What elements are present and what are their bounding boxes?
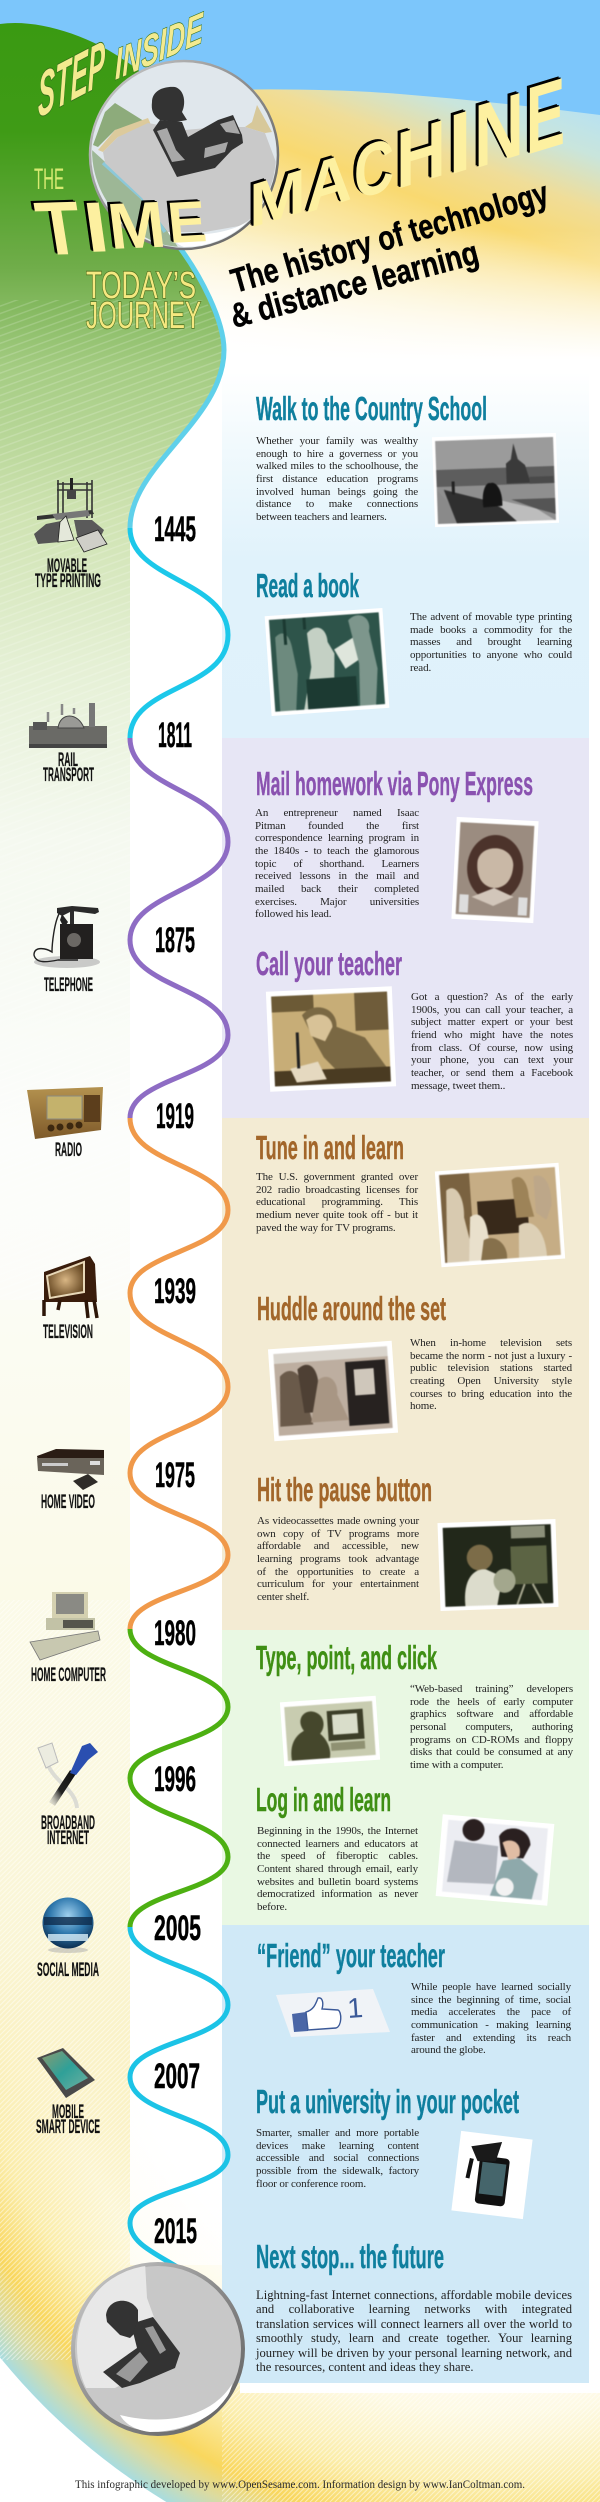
- text: huddle around the set: public television stations started: [410, 1362, 572, 1374]
- text: log in and learn: Content shared through email, early: [257, 1863, 418, 1875]
- text: next stop the future: and collaborative learning networks with integrated: [256, 2302, 572, 2316]
- technology labels: TELEPHONE: [44, 975, 93, 996]
- heading: Call your teacher: Call your teacher: [256, 945, 402, 982]
- heading: Read a book: Read a book: [256, 567, 359, 604]
- icon: television: [44, 1256, 97, 1318]
- text: put a university in your pocket: possible from the sidewalk, factory: [256, 2165, 419, 2177]
- text: hit the pause button: own copy of TV programs more: [257, 1528, 419, 1540]
- text: log in and learn: democratized information as never: [257, 1888, 418, 1900]
- text: read a book: opportunities to anyone who could: [410, 649, 572, 661]
- text: mail homework: Pitman founded the first: [255, 820, 419, 832]
- icon: broadband cables: [38, 1743, 98, 1808]
- timeline years: 1445: [154, 510, 196, 549]
- text: log in and learn: websites and bulletin board systems: [257, 1876, 418, 1888]
- text: tune in and learn: [256, 1171, 418, 1234]
- text: tune in and learn: The U.S. government granted over: [256, 1171, 418, 1183]
- technology labels: BROADBAND: [41, 1813, 95, 1834]
- text: walk to school: involved human beings going the: [256, 486, 418, 498]
- text: type, point, and click: “Web-based training” developers: [410, 1683, 573, 1695]
- technology labels: MOBILE: [52, 2102, 84, 2123]
- text: hit the pause button: As videocassettes made owning your: [257, 1515, 419, 1527]
- text: mail homework: the 1840s - to teach the glamorous: [255, 845, 419, 857]
- text: put a university in your pocket: [256, 2127, 420, 2190]
- text: tune in and learn: 202 radio broadcasting licenses for: [256, 1184, 418, 1196]
- timeline years: 2005: [154, 1909, 201, 1948]
- panel: mail and call (purple): [222, 738, 589, 1118]
- text: next stop the future: smoothly study, learn and create together. Your learning: [256, 2331, 572, 2345]
- text: call your teacher: from class. Of course, now using: [411, 1042, 573, 1054]
- text: type, point, and click: [410, 1683, 574, 1771]
- text: put a university in your pocket: devices make learning content: [256, 2140, 419, 2152]
- timeline years: 2015: [154, 2212, 197, 2251]
- text: log in and learn: the speed of fiberoptic cables.: [257, 1850, 418, 1862]
- timeline years: 1875: [155, 921, 195, 960]
- text: friend your teacher: communication - making learning: [411, 2019, 571, 2031]
- text: huddle around the set: courses to bring education into the: [410, 1388, 572, 1400]
- icon: video recorder: [37, 1449, 104, 1490]
- text: call your teacher: 1900s, you can call your teacher, a: [411, 1004, 573, 1016]
- text: type, point, and click: disks that could be consumed at any: [410, 1746, 573, 1758]
- title: Machine: H: [396, 103, 446, 207]
- text: friend your teacher: media accelerates the pace of: [411, 2006, 571, 2018]
- title: Time: E: [165, 190, 209, 256]
- photo: boy at computer: [280, 1696, 380, 1766]
- text: walk to school: walked miles to the schoolhouse, the: [256, 460, 418, 472]
- title: Machine: C: [354, 122, 394, 217]
- heading: Tune in and learn: Tune in and learn: [256, 1129, 404, 1166]
- title: Today's Journey: [86, 265, 201, 337]
- text: call your teacher: message, tweet them..: [411, 1080, 505, 1092]
- title: Time: T: [30, 186, 88, 271]
- photo: painter on television: [438, 1519, 558, 1611]
- credit line: This infographic developed by www.OpenSesame.com. Information design by www.IanColtman.com.: [75, 2478, 525, 2491]
- icon: home computer: [30, 1592, 100, 1660]
- text: walk to school: [256, 435, 418, 523]
- text: type, point, and click: time with a computer.: [410, 1759, 503, 1771]
- title: Machine: [249, 57, 565, 242]
- text: log in and learn: connected learners and educators at: [257, 1838, 418, 1850]
- text: type, point, and click: rode the heels of early computer: [410, 1696, 573, 1708]
- text: huddle around the set: creating Open University style: [410, 1375, 572, 1387]
- text: mail homework: exercises. Major universities: [255, 896, 419, 908]
- text: type, point, and click: programs on CD-ROMs and floppy: [410, 1734, 573, 1746]
- photo: man on telephone: [266, 986, 396, 1092]
- heading: Next stop... the future: Next stop... the future: [256, 2238, 444, 2275]
- text: log in and learn: before.: [257, 1901, 287, 1913]
- text: call your teacher: your phone, you can text your: [411, 1054, 573, 1066]
- photo: children around radio: [435, 1163, 565, 1267]
- text: mail homework: received lessons in the mail and: [255, 870, 419, 882]
- top time machine porthole: [90, 61, 278, 250]
- text: friend your teacher: around the globe.: [411, 2044, 486, 2056]
- text: call your teacher: subject matter expert or your best: [411, 1016, 573, 1028]
- timeline, years, icons and header artwork: SMART DEVICE: [36, 2117, 100, 2138]
- title: Machine: N: [474, 73, 524, 189]
- photo: country church: [432, 433, 559, 527]
- technology labels: MOVABLE: [47, 556, 87, 577]
- text: huddle around the set: home.: [410, 1400, 437, 1412]
- timeline years: 1975: [155, 1456, 195, 1495]
- text: mail homework: followed his lead.: [255, 908, 331, 920]
- text: hit the pause button: center shelf.: [257, 1591, 309, 1603]
- text: next stop the future: Lightning-fast Internet connections, affordable mobile devices: [256, 2288, 572, 2302]
- text: hit the pause button: [257, 1515, 420, 1603]
- timeline, years, icons and header artwork: HOME COMPUTER: [31, 1665, 106, 1686]
- timeline years: 1919: [156, 1097, 194, 1136]
- photo: Franklin stamp: [451, 817, 539, 923]
- panel: walk and read (blue): [222, 350, 589, 738]
- heading: Huddle around the set: Huddle around the set: [257, 1290, 446, 1327]
- text: call your teacher: Got a question? As of the early: [411, 991, 573, 1003]
- technology labels: RAIL: [58, 750, 78, 771]
- text: friend your teacher: since the beginning of time, social: [411, 1994, 571, 2006]
- text: next stop the future: journey will be driven by your personal learning network, and: [256, 2346, 572, 2360]
- text: log in and learn: Beginning in the 1990s, the Internet: [257, 1825, 418, 1837]
- title: Step Inside: [38, 3, 204, 132]
- text: walk to school: distance to make connections: [256, 498, 418, 510]
- text: put a university in your pocket: floor or conference room.: [256, 2178, 366, 2190]
- text: huddle around the set: became the norm - not just a luxury -: [410, 1350, 572, 1362]
- title: The: THE: [34, 163, 64, 196]
- text: type, point, and click: graphics software and affordable: [410, 1708, 573, 1720]
- text: next stop the future: the resources, content and ideas they share.: [256, 2360, 474, 2374]
- timeline years: 2007: [154, 2057, 200, 2096]
- subtitle: history of technology and distance learning: [226, 174, 553, 336]
- text: tune in and learn: medium never quite took off - but it: [256, 1209, 418, 1221]
- text: put a university in your pocket: Smarter, smaller and more portable: [256, 2127, 419, 2139]
- text: walk to school: first distance education programs: [256, 473, 418, 485]
- text: mail homework: [255, 807, 419, 920]
- text: huddle around the set: When in-home television sets: [410, 1337, 572, 1349]
- title: Time: [30, 186, 209, 271]
- text: hit the pause button: learning programs took advantage: [257, 1553, 419, 1565]
- text: read a book: [410, 611, 572, 674]
- text: hit the pause button: of the opportunities to create a: [257, 1566, 419, 1578]
- text: hit the pause button: affordable and accessible, new: [257, 1540, 419, 1552]
- icon: printing press: [34, 478, 107, 552]
- technology labels: TELEVISION: [43, 1322, 93, 1343]
- icon: radio: [27, 1087, 103, 1139]
- text: walk to school: between teachers and learners.: [256, 511, 387, 523]
- text: call your teacher: [411, 991, 574, 1092]
- text: type, point, and click: personal computers, authoring: [410, 1721, 573, 1733]
- text: friend your teacher: While people have learned socially: [411, 1981, 571, 1993]
- timeline years: 1939: [154, 1272, 196, 1311]
- photo: women with laptop: [436, 1814, 554, 1906]
- title: Time: M: [104, 189, 169, 264]
- timeline years: [154, 510, 201, 2251]
- title: Machine: E: [526, 57, 565, 176]
- heading: Hit the pause button: Hit the pause button: [257, 1471, 432, 1508]
- photo: printers reading a book: [265, 608, 389, 716]
- text: friend your teacher: [411, 1981, 572, 2056]
- panel: computers and internet (green): [222, 1630, 589, 1925]
- text: put a university in your pocket: accessible and social connections: [256, 2152, 419, 2164]
- title: Today's Journey: TODAY’S: [86, 265, 196, 307]
- photo: thumbs up like: [276, 1989, 390, 2037]
- text: read a book: The advent of movable type printing: [410, 611, 572, 623]
- photo: family watching television: [268, 1341, 398, 1441]
- title: Machine: M: [249, 156, 306, 242]
- text: huddle around the set: [410, 1337, 572, 1412]
- text: tune in and learn: paved the way for TV programs.: [256, 1222, 396, 1234]
- panel: social, mobile and future (blue): [222, 1925, 589, 2383]
- icon: smart phone: [37, 2048, 95, 2098]
- technology labels: RADIO: [55, 1140, 82, 1161]
- technology labels: HOME VIDEO: [41, 1492, 95, 1513]
- text: read a book: made books a commodity for the: [410, 624, 572, 636]
- text: read a book: masses and brought learning: [410, 636, 572, 648]
- text: call your teacher: friend who might have the notes: [411, 1029, 573, 1041]
- photo: smartphone with graduation cap: [451, 2131, 533, 2219]
- text: next stop the future: [256, 2288, 572, 2374]
- technology labels: TRANSPORT: [43, 765, 94, 786]
- icon: social media globe: [42, 1898, 94, 1953]
- text: tune in and learn: educational programming. This: [256, 1196, 418, 1208]
- icon: telephone: [34, 906, 100, 968]
- timeline years: 1996: [154, 1760, 196, 1799]
- timeline, years, icons and header artwork: TYPE PRINTING: [35, 571, 101, 592]
- text: hit the pause button: curriculum for your entertainment: [257, 1578, 419, 1590]
- panel: radio, tv and video (tan): [222, 1118, 589, 1630]
- title: Machine: I: [448, 91, 472, 194]
- text: read a book: read.: [410, 662, 431, 674]
- text: mail homework: correspondence learning program in: [255, 832, 419, 844]
- text: friend your teacher: faster and extending its reach: [411, 2032, 571, 2044]
- title: Today's Journey: JOURNEY: [86, 295, 201, 337]
- heading: Type, point, and click: Type, point, and click: [256, 1639, 437, 1676]
- timeline years: 1811: [158, 716, 192, 755]
- technology labels: SOCIAL MEDIA: [37, 1960, 99, 1981]
- icon: steam locomotive: [29, 703, 107, 748]
- heading: Friend your teacher: “Friend” your teacher: [257, 1937, 445, 1974]
- title: Time: I: [79, 188, 113, 268]
- text: walk to school: enough to hire a governess or you: [256, 448, 418, 460]
- text: next stop the future: translation services will connect learners all over the world to: [256, 2317, 572, 2331]
- timeline years: 1980: [154, 1614, 196, 1653]
- technology labels: [31, 556, 106, 2138]
- text: mail homework: topic of shorthand. Learners: [255, 858, 419, 870]
- subtitle: history of technology and distance learning: & distance learning: [226, 234, 483, 336]
- timeline: wavy path: [130, 248, 228, 2272]
- text: mail homework: mailed back their completed: [255, 883, 419, 895]
- title: Step Inside: STEP: [38, 26, 105, 132]
- title: Machine: A: [306, 138, 352, 228]
- text: mail homework: An entrepreneur named Isaac: [255, 807, 419, 819]
- heading: Log in and learn: Log in and learn: [256, 1781, 391, 1818]
- photo: thumbs up like: 1: [346, 1992, 364, 2024]
- text: call your teacher: teacher, or send them a Facebook: [411, 1067, 573, 1079]
- text: log in and learn: [257, 1825, 418, 1913]
- technology labels: INTERNET: [47, 1828, 89, 1849]
- text: walk to school: Whether your family was wealthy: [256, 435, 418, 447]
- bottom time machine porthole: [73, 2262, 243, 2434]
